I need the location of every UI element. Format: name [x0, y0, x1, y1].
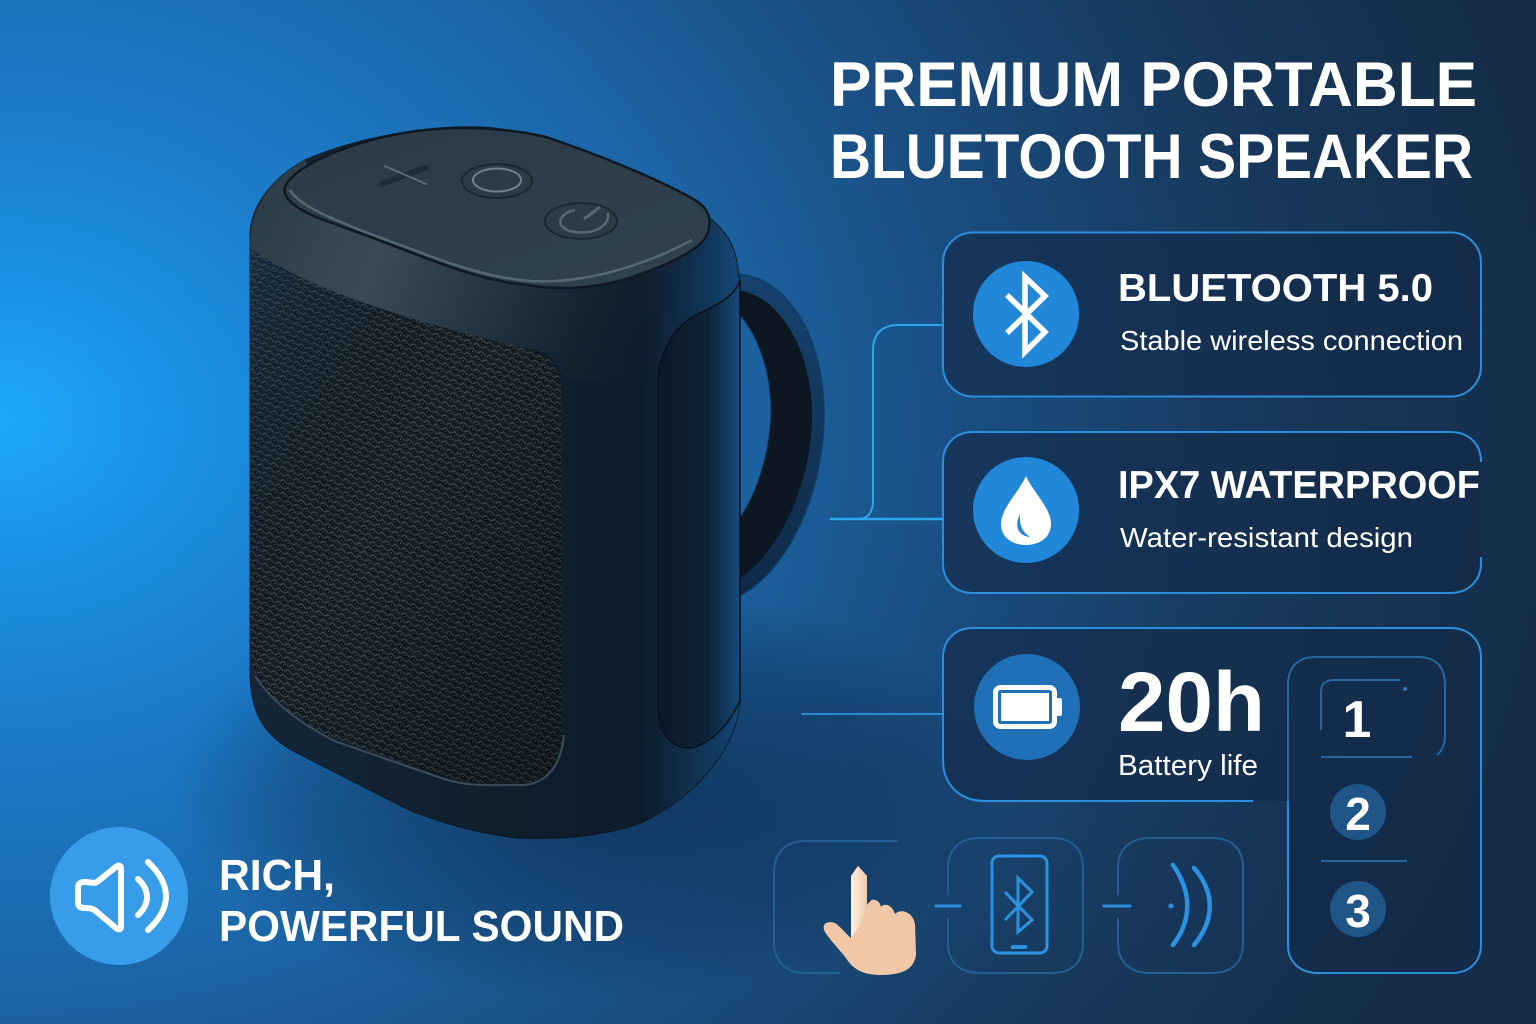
panel: touch step [774, 841, 916, 975]
panel: waterproof [943, 432, 1481, 593]
callout: rich powerful sound [50, 827, 624, 965]
connector dash one [936, 904, 960, 908]
button: power [545, 203, 617, 239]
text: bluetooth description: Stable wireless connection [1120, 325, 1463, 356]
icon: bluetooth [973, 261, 1079, 367]
panel: sound wave step [1118, 838, 1243, 973]
speaker handle [738, 274, 824, 597]
icon: speaker volume [50, 827, 188, 965]
step 3 number: 3 [1345, 885, 1371, 937]
icon: water drop [973, 457, 1079, 563]
connector dash two [1104, 904, 1130, 908]
speaker lower trim [255, 676, 564, 785]
icon: pointing hand [824, 866, 916, 975]
speaker upper band [250, 160, 737, 382]
button: volume cross [382, 166, 426, 184]
text: battery life: Battery life [1118, 750, 1258, 782]
icon: phone with bluetooth [992, 856, 1047, 953]
panel: numbered steps [1288, 657, 1445, 937]
button: ring [462, 164, 532, 198]
step 2 number: 2 [1345, 788, 1371, 840]
speaker body [250, 127, 740, 839]
icon: battery [974, 654, 1080, 760]
step 1 number: 1 [1343, 691, 1371, 749]
touch box outline [774, 841, 898, 973]
speaker side panel [658, 280, 740, 748]
panel: battery [943, 628, 1481, 973]
step 1 dot [1403, 687, 1407, 691]
card outline [943, 432, 1481, 593]
text: rich: RICH, [219, 851, 335, 900]
speaker grille [250, 248, 562, 783]
step 2 number [1330, 784, 1386, 840]
title [830, 50, 1477, 192]
speaker shadow [170, 580, 1010, 1000]
speaker plate highlight [290, 190, 692, 281]
step 3 number [1330, 881, 1386, 937]
title: BLUETOOTH SPEAKER [830, 122, 1473, 192]
step divider two [1321, 860, 1407, 862]
stat: 20h: 20h [1118, 655, 1265, 749]
step divider one [1321, 756, 1412, 758]
sound box outline [1118, 838, 1243, 973]
card outline [943, 232, 1481, 396]
steps inner outline [1288, 657, 1445, 801]
heading: bluetooth: BLUETOOTH 5.0 [1118, 267, 1433, 310]
connector lines [802, 325, 943, 714]
title: PREMIUM PORTABLE [830, 50, 1477, 120]
text: waterproof description: Water-resistant design [1120, 522, 1413, 553]
panel: phone pairing step [948, 838, 1083, 973]
icon: sound waves [1168, 865, 1210, 945]
card outline [943, 628, 1481, 973]
speaker top plate [285, 128, 709, 288]
step 1 box [1321, 680, 1400, 730]
text: powerful sound: POWERFUL SOUND [219, 902, 624, 951]
panel: bluetooth [943, 232, 1481, 396]
heading: waterproof: IPX7 WATERPROOF [1118, 464, 1480, 507]
speaker product illustration [250, 127, 824, 839]
phone box outline [948, 838, 1083, 973]
